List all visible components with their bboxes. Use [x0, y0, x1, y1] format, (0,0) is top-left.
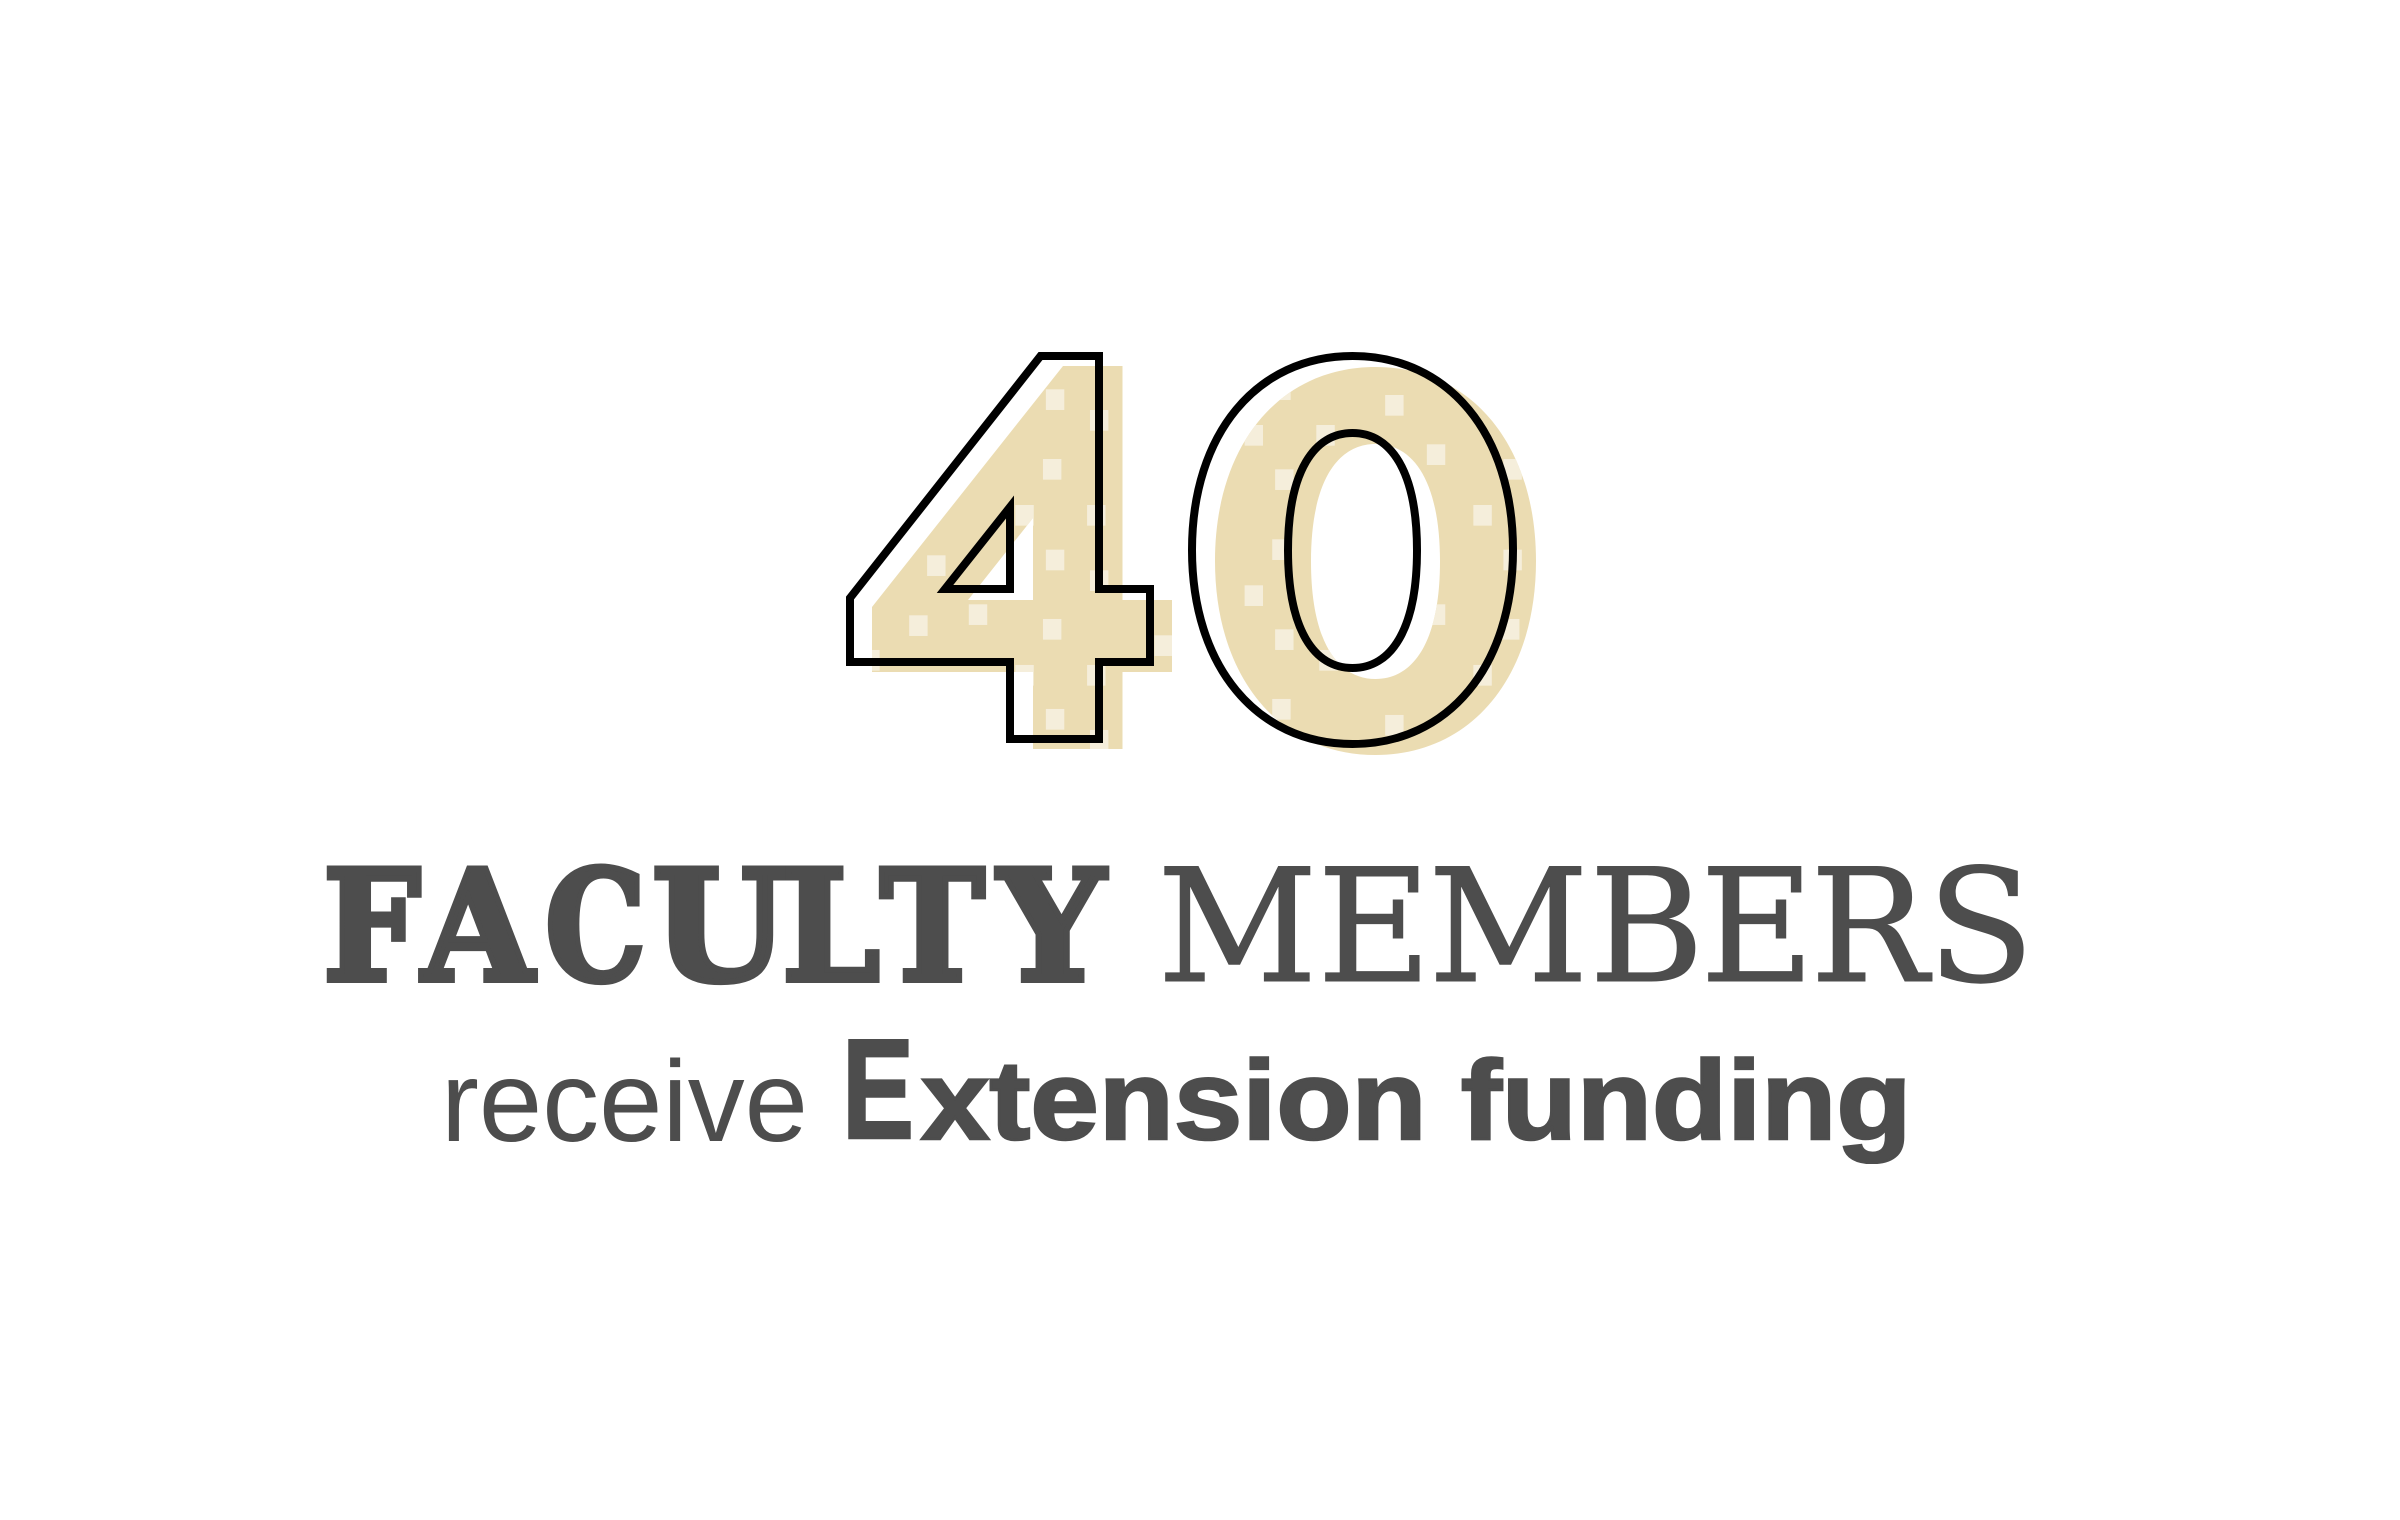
word: FACULTY: A [422, 837, 534, 1017]
word: FACULTY: U [652, 837, 788, 1017]
words: Extension funding: E [842, 1010, 914, 1169]
word: FACULTY: C [545, 837, 646, 1017]
words: Extension funding: xtension funding [921, 1038, 1912, 1163]
word: FACULTY [323, 837, 1110, 1017]
big number 40 [850, 356, 1536, 755]
word: FACULTY: T [880, 837, 985, 1017]
word: FACULTY: F [323, 837, 421, 1017]
black outline of digit 4 [850, 356, 1150, 739]
infographic graphic layer [448, 352, 2024, 1142]
word: receive: receive [441, 1038, 808, 1166]
black outline of digit 0 [1192, 356, 1513, 744]
word: MEMBERS: MEMBERS [1157, 836, 2035, 1019]
word: FACULTY: L [782, 837, 880, 1017]
word: FACULTY: Y [998, 837, 1105, 1017]
gold offset fill of 40 [872, 366, 1536, 755]
pale square dots on gold [861, 379, 1522, 751]
